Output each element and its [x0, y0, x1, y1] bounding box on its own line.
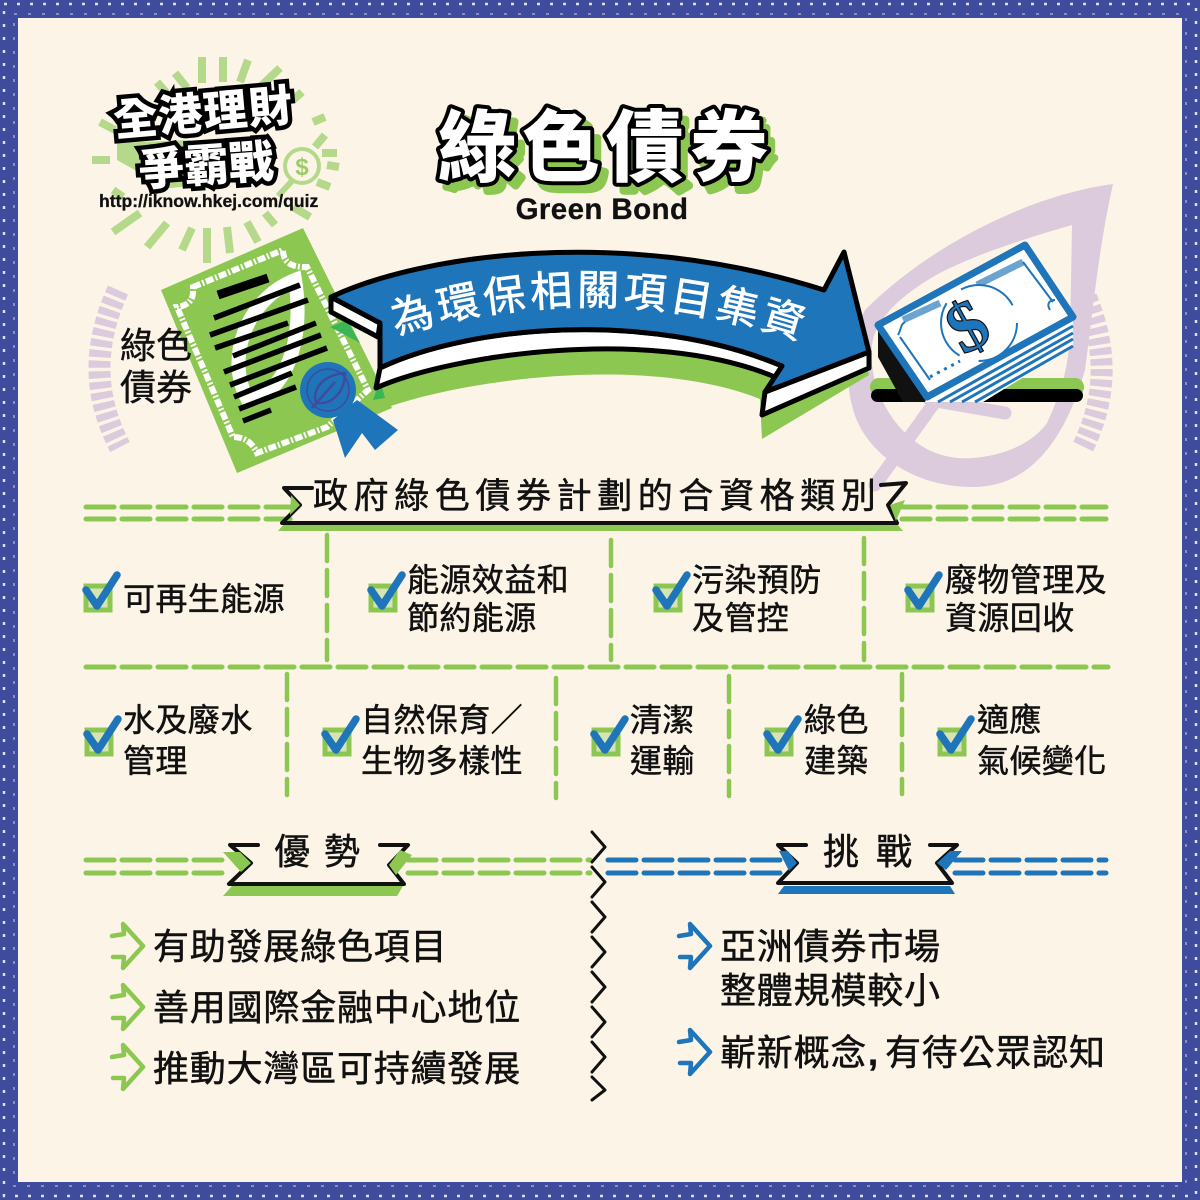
category: transport	[594, 702, 695, 779]
category: waste: 廢物管理及	[945, 562, 1107, 598]
logo: quiz badge	[92, 57, 339, 263]
ribbon: advantages	[86, 831, 590, 896]
label: green bond: 債券	[120, 367, 192, 408]
advantage 2: 善用國際金融中心地位	[153, 987, 521, 1028]
grid dividers	[86, 535, 1108, 798]
certificate text lines	[210, 278, 327, 421]
banner text: 為環保相關項目集資	[391, 270, 806, 342]
advantage 3: 推動大灣區可持續發展	[153, 1048, 521, 1089]
category: energy efficiency	[371, 562, 569, 636]
category: transport: 清潔	[630, 702, 695, 738]
challenge 2: 嶄新概念	[720, 1032, 867, 1073]
logo title line 2: 爭霸戰	[137, 136, 275, 196]
category: energy efficiency: 節約能源	[407, 600, 537, 636]
category: water: 水及廢水	[123, 702, 253, 738]
heading: challenges: 挑戰	[823, 831, 929, 872]
certificate	[161, 228, 398, 473]
slot	[870, 378, 1084, 402]
heading: advantages: 優勢	[274, 831, 374, 872]
right tick arc	[1082, 288, 1102, 447]
logo shadow block	[117, 140, 200, 190]
category: building: 建築	[804, 743, 869, 779]
light bulb dollar icon	[278, 149, 319, 196]
challenge 1: 亞洲債券市場	[720, 926, 941, 967]
category: energy efficiency: 能源效益和	[407, 562, 569, 598]
zigzag divider	[592, 832, 605, 1100]
advantage 1: 有助發展綠色項目	[153, 926, 447, 967]
label: green bond	[120, 325, 192, 408]
category: climate: 適應	[977, 702, 1042, 738]
category: nature	[325, 702, 523, 779]
logo title line 1: 全港理財	[112, 81, 295, 146]
category: water: 管理	[123, 743, 188, 779]
category: pollution	[656, 562, 822, 636]
certificate ribbon seal	[300, 362, 398, 458]
category: water	[87, 702, 253, 779]
section ribbon: eligible categories	[86, 477, 1106, 531]
banner arrow	[328, 250, 872, 439]
challenge 2: 有待公眾認知	[885, 1032, 1106, 1073]
certificate watermark	[239, 280, 298, 400]
light bulb dollar icon: $	[295, 154, 309, 181]
sunburst rays	[92, 57, 339, 263]
ribbon: challenges	[608, 831, 1106, 894]
money stack on slot	[870, 245, 1084, 402]
category: renewable energy	[86, 575, 285, 617]
money stack on slot: $	[932, 282, 1003, 370]
category: pollution: 及管控	[692, 600, 789, 636]
challenge 2	[679, 1030, 1106, 1074]
ribbon heading: 政府綠色債券計劃的合資格類別	[313, 477, 881, 516]
logo url: http://iknow.hkej.com/quiz	[99, 191, 318, 211]
challenge 1	[679, 924, 941, 1011]
category: waste	[908, 562, 1107, 636]
certificate border	[177, 250, 368, 453]
category: transport: 運輸	[630, 743, 695, 779]
subtitle: Green Bond	[516, 193, 688, 226]
category: waste: 資源回收	[945, 600, 1075, 636]
category: building	[767, 702, 869, 779]
title: 綠色債券	[445, 112, 781, 200]
challenge 1: 整體規模較小	[720, 970, 941, 1011]
label: green bond: 綠色	[120, 325, 192, 366]
category: nature: 自然保育／	[361, 702, 523, 738]
decorative leaf	[848, 184, 1113, 487]
category: renewable energy: 可再生能源	[123, 581, 285, 617]
category: pollution: 污染預防	[692, 562, 822, 598]
category: nature: 生物多樣性	[361, 743, 523, 779]
challenge 2: ,	[868, 1032, 879, 1073]
category: building: 綠色	[804, 702, 869, 738]
category: climate	[940, 702, 1107, 779]
left tick arc	[99, 290, 120, 447]
title: 綠色債券	[438, 104, 774, 192]
category: climate: 氣候變化	[977, 743, 1107, 779]
